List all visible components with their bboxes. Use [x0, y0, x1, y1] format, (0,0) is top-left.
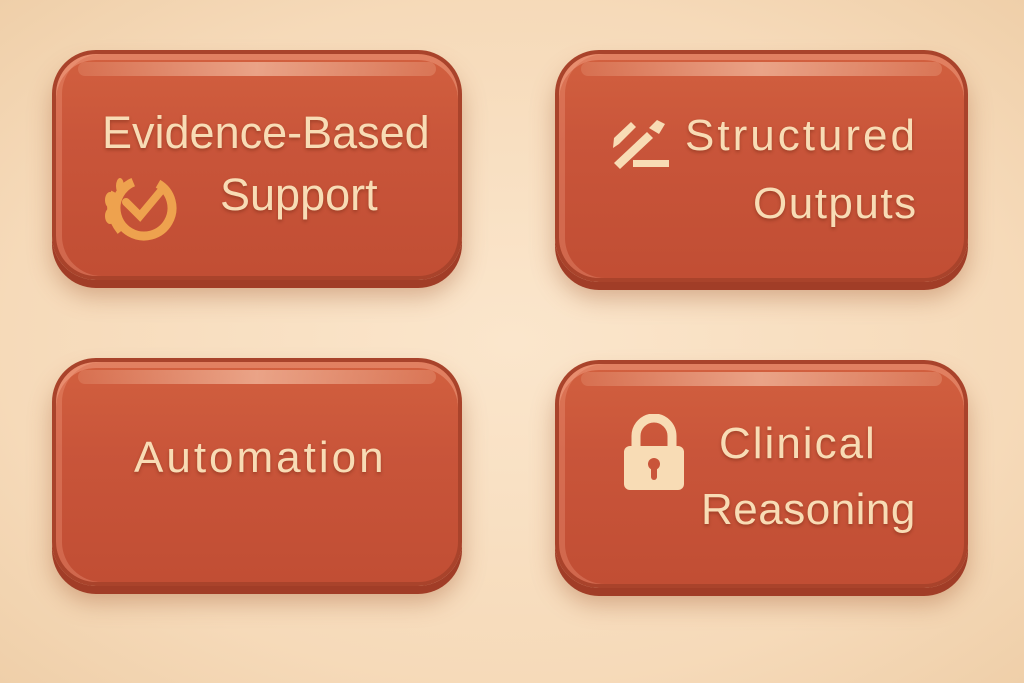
panel: evidence-based support — [52, 50, 462, 280]
panel: automation — [52, 358, 462, 586]
heading line 2: Support — [220, 169, 378, 220]
heading line 2: Reasoning — [701, 485, 916, 534]
panel: structured outputs — [555, 50, 968, 282]
icon: check in laurel gear — [105, 178, 177, 241]
heading: evidence-based support: Evidence-Based — [102, 107, 430, 158]
heading: automation: Automation — [134, 433, 387, 482]
heading: structured outputs: Structured — [685, 111, 918, 160]
panel: clinical reasoning — [555, 360, 968, 588]
icon: pencil — [613, 120, 669, 169]
heading line 2: Outputs — [753, 179, 918, 228]
icon: padlock — [624, 414, 684, 490]
heading: clinical reasoning: Clinical — [719, 419, 877, 468]
